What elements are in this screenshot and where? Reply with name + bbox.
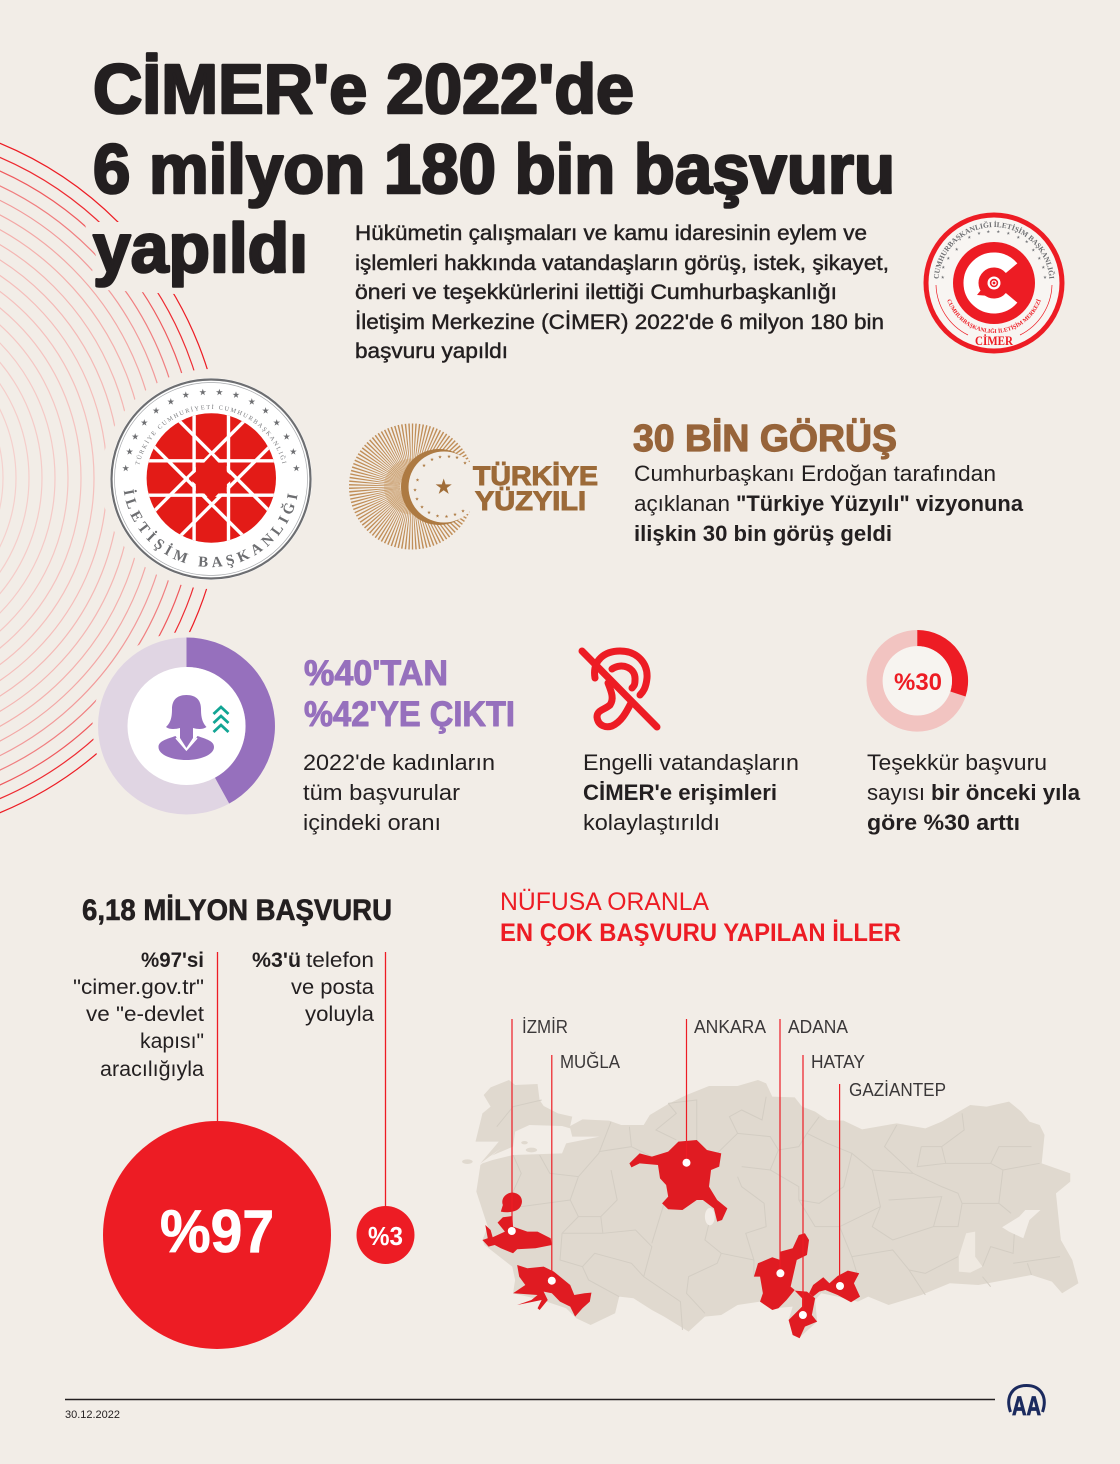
icon: İletişim Başkanlığı seal: İLETİŞİM BAŞKANLIĞI [124, 489, 298, 568]
intro text block: Hükümetin çalışmaları ve kamu idaresinin eylem ve [355, 222, 867, 245]
panel: women share text [303, 654, 515, 835]
panel: 30 bin görüş: "Türkiye Yüzyılı" vizyonuna [736, 491, 1024, 516]
heading: provinces: NÜFUSA ORANLA [500, 888, 709, 916]
text: thanks: Teşekkür başvuru [867, 750, 1047, 775]
text: %3 channel: ve posta [291, 976, 374, 999]
title [93, 50, 895, 287]
text: thanks: göre %30 arttı [867, 810, 1020, 835]
panel: women share text: 2022'de kadınların [303, 750, 495, 775]
icon: İletişim Başkanlığı seal: TÜRKİYE CUMHURİYETİ CUMHURBAŞKANLIĞI [135, 404, 286, 464]
chart: %97 bubble with leader line [103, 952, 331, 1349]
panel: women share text: %42'YE ÇIKTI [304, 695, 515, 734]
text: %97 channel: aracılığıyla [100, 1058, 204, 1081]
province: Gaziantep [809, 1271, 860, 1302]
text: accessibility: kolaylaştırıldı [583, 810, 720, 835]
intro text block: işlemleri hakkında vatandaşların görüş, istek, şikayet, [355, 252, 889, 275]
text: thanks [867, 750, 1081, 835]
text: %97 channel: "cimer.gov.tr" [73, 976, 204, 999]
text: %97 channel: %97'si [141, 949, 204, 972]
text: %3 channel: telefon [306, 949, 374, 972]
icon: woman with upward chevrons [158, 695, 228, 760]
heading: provinces: EN ÇOK BAŞVURU YAPILAN İLLER [500, 919, 901, 947]
icon: İletişim Başkanlığı seal [110, 378, 312, 580]
panel: 30 bin görüş [633, 417, 1024, 546]
labels: provinces: GAZİANTEP [849, 1080, 946, 1100]
panel: 30 bin görüş: ilişkin 30 bin görüş geldi [634, 521, 892, 546]
chart: %97 bubble with leader line: %97 [160, 1198, 274, 1265]
labels: provinces: MUĞLA [560, 1051, 620, 1072]
icon: Türkiye Yüzyılı logo: YÜZYILI [475, 486, 586, 516]
title: yapıldı [93, 209, 308, 287]
intro text block: başvuru yapıldı [355, 340, 508, 363]
intro text block [355, 222, 889, 363]
panel: women share text: %40'TAN [304, 654, 448, 693]
chart: women share donut [98, 638, 275, 814]
chart: %3 bubble with leader line: %3 [368, 1221, 403, 1251]
panel: women share text: içindeki oranı [303, 810, 441, 835]
text: accessibility: CİMER'e erişimleri [583, 780, 777, 805]
text: %97 channel: kapısı" [140, 1030, 204, 1053]
panel: women share text: tüm başvurular [303, 780, 460, 805]
labels: provinces: HATAY [811, 1052, 865, 1072]
province: Ankara [629, 1140, 727, 1222]
title: CİMER'e 2022'de [93, 50, 634, 128]
panel: 30 bin görüş: açıklanan [634, 491, 730, 516]
chart: %30 donut: %30 [894, 669, 942, 696]
province: Hatay [789, 1291, 817, 1338]
text: %3 channel [252, 949, 374, 1026]
icon: Türkiye Yüzyılı logo: TÜRKİYE [473, 461, 598, 491]
labels: provinces: ADANA [788, 1017, 848, 1037]
heading: 6,18 milyon başvuru: 6,18 MİLYON BAŞVURU [82, 894, 392, 927]
intro text block: İletişim Merkezine (CİMER) 2022'de 6 milyon 180 bin [355, 311, 884, 334]
labels: provinces [522, 1017, 946, 1100]
heading: provinces [500, 888, 901, 947]
text: accessibility: Engelli vatandaşların [583, 750, 799, 775]
province: Adana [754, 1233, 809, 1310]
labels: provinces: İZMİR [522, 1017, 568, 1037]
icon: AA logo: AA [1012, 1391, 1041, 1421]
labels: provinces: ANKARA [694, 1017, 766, 1037]
icon: CİMER seal: CUMHURBAŞKANLIĞI İLETİŞİM BAŞKANLIĞI [934, 220, 1056, 279]
intro text block: öneri ve teşekkürlerini ilettiği Cumhurbaşkanlığı [355, 281, 837, 304]
province: İzmir [482, 1192, 552, 1253]
icon: CİMER seal: CİMER [975, 333, 1014, 348]
icon: crossed-out ear [582, 651, 657, 727]
text: %97 channel [73, 949, 204, 1081]
icon: AA logo [1009, 1386, 1044, 1421]
footer rule and date: 30.12.2022 [65, 1409, 120, 1421]
text: thanks: sayısı [867, 780, 925, 805]
chart: Turkey map [462, 1017, 1078, 1338]
chart: %30 donut [866, 630, 968, 732]
icon: CİMER seal: CUMHURBAŞKANLIĞI İLETİŞİM MERKEZİ [948, 299, 1041, 333]
text: %3 channel: yoluyla [305, 1003, 374, 1026]
panel: 30 bin görüş: 30 BİN GÖRÜŞ [633, 417, 897, 460]
text: accessibility [583, 750, 799, 835]
panel: 30 bin görüş: Cumhurbaşkanı Erdoğan tarafından [634, 461, 996, 486]
text: %3 channel: %3'ü [252, 949, 301, 972]
chart: %3 bubble with leader line [356, 952, 414, 1264]
icon: Türkiye Yüzyılı logo [374, 449, 598, 525]
icon: CİMER seal [924, 212, 1064, 354]
province: Muğla [513, 1265, 591, 1317]
text: thanks: bir önceki yıla [931, 780, 1081, 805]
text: %97 channel: ve "e-devlet [86, 1003, 204, 1026]
title: 6 milyon 180 bin başvuru [93, 130, 895, 208]
